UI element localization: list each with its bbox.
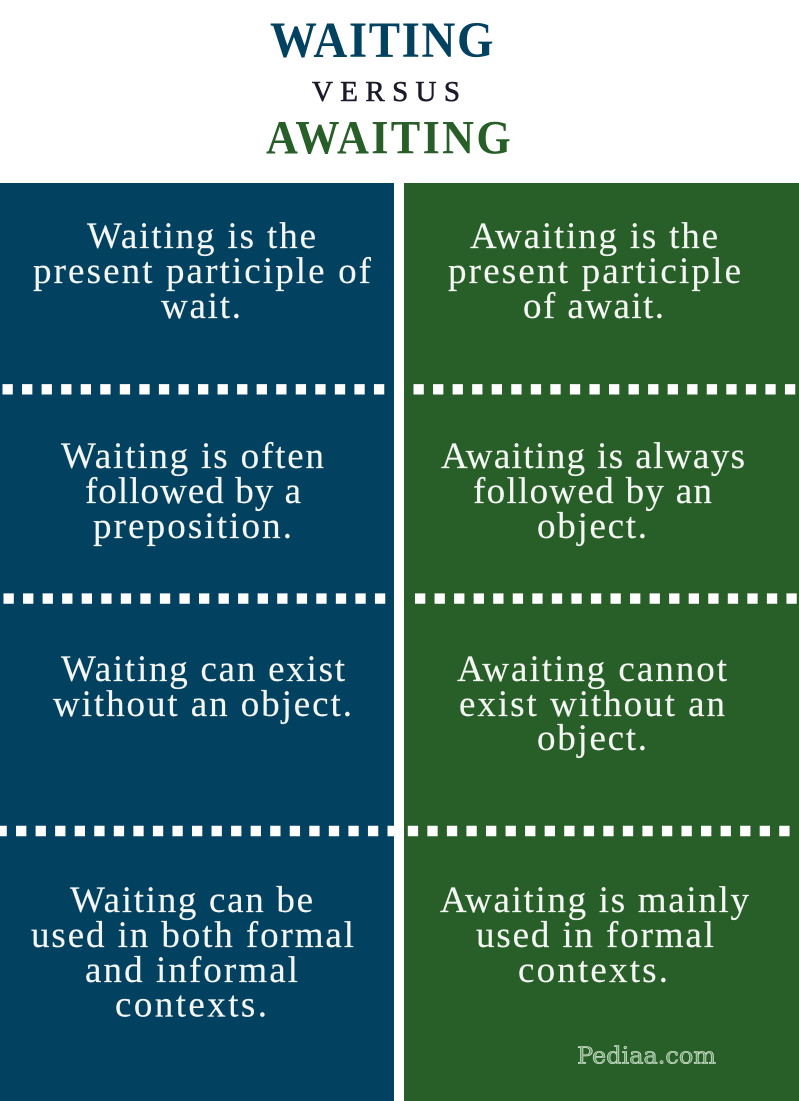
text: awaiting row 3: object. [537, 718, 647, 759]
text: waiting row 3: Waiting can exist [61, 649, 346, 690]
text: waiting row 2: followed by a [85, 471, 301, 512]
text: waiting row 3: without an object. [53, 684, 352, 725]
panel: awaiting column [404, 183, 799, 1101]
text: waiting row 2 [61, 436, 324, 547]
text: waiting row 4: and informal [85, 950, 298, 991]
title [266, 11, 511, 164]
heading: versus: VERSUS [312, 76, 460, 108]
text: awaiting row 1 [448, 216, 741, 327]
text: awaiting row 2: object. [537, 506, 647, 547]
text: awaiting row 2: Awaiting is always [441, 436, 745, 477]
text: waiting row 2: preposition. [93, 506, 292, 547]
text: waiting row 1 [33, 216, 372, 327]
panel: waiting column [0, 183, 394, 1101]
text: awaiting row 2: followed by an [473, 471, 712, 512]
text: awaiting row 1: present participle [448, 251, 741, 292]
text: waiting row 2: Waiting is often [61, 436, 324, 477]
logo: Pediaa.com: Pediaa.com [577, 1044, 716, 1070]
heading: awaiting: AWAITING [266, 111, 511, 164]
text: awaiting row 3: Awaiting cannot [457, 649, 728, 690]
text: awaiting row 3: exist without an [459, 684, 725, 725]
text: awaiting row 1: of await. [523, 286, 664, 327]
text: awaiting row 4: used in formal [476, 915, 714, 956]
text: waiting row 4 [31, 880, 354, 1026]
text: waiting row 4: used in both formal [31, 915, 354, 956]
text: awaiting row 4: contexts. [518, 950, 668, 991]
text: awaiting row 2 [441, 436, 745, 547]
text: awaiting row 4: Awaiting is mainly [440, 880, 750, 921]
text: waiting row 1: present participle of [33, 251, 372, 292]
text: awaiting row 3 [457, 649, 728, 759]
heading: waiting: WAITING [270, 11, 494, 68]
text: waiting row 1: Waiting is the [87, 216, 316, 257]
text: waiting row 1: wait. [161, 286, 241, 327]
text: waiting row 3 [53, 649, 352, 725]
text: waiting row 4: contexts. [115, 984, 267, 1026]
text: awaiting row 1: Awaiting is the [470, 216, 718, 257]
text: awaiting row 4 [440, 880, 750, 991]
text: waiting row 4: Waiting can be [70, 880, 313, 921]
